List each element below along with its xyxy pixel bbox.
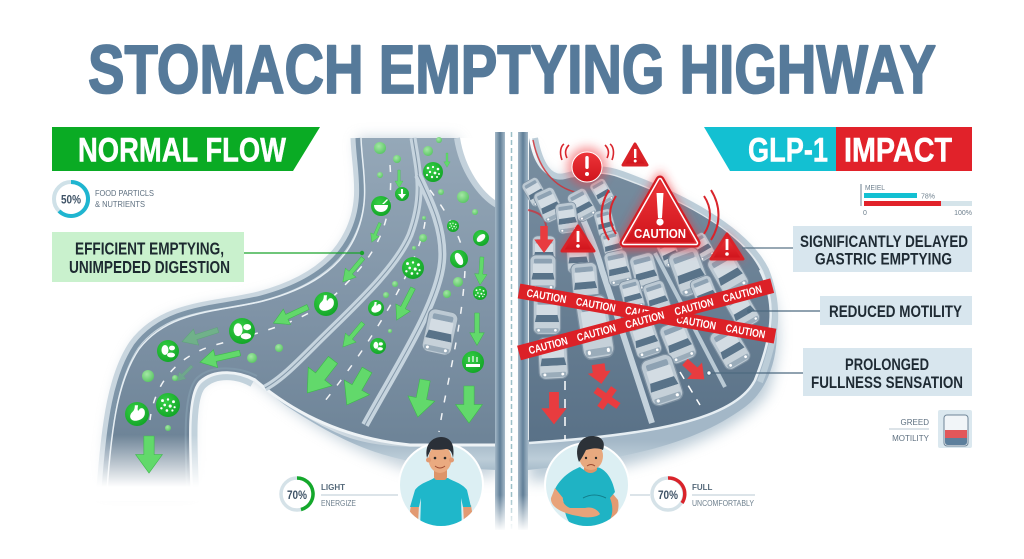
highway: GLP-1 congested road	[528, 138, 778, 482]
caution tapes: CAUTION	[722, 284, 763, 306]
callout: efficient emptying: EFFICIENT EMPTYING,	[75, 238, 224, 258]
header: normal flow: NORMAL FLOW	[78, 132, 287, 170]
callout: efficient emptying	[52, 232, 364, 282]
caution tapes: CAUTION	[725, 323, 766, 341]
stat ring: 70% light	[281, 478, 398, 510]
red blocked arrows	[534, 226, 712, 424]
person: light and energized	[399, 437, 483, 530]
caution tapes: CAUTION	[624, 310, 666, 331]
caution tapes: CAUTION	[527, 335, 569, 357]
mini bar chart: 100%	[954, 210, 972, 217]
highway: normal flow stomach road	[80, 138, 497, 501]
callout: delayed gastric emptying: SIGNIFICANTLY DELAYED	[800, 232, 968, 251]
mini bar chart: 78%	[921, 194, 935, 200]
warning siren circle	[561, 144, 613, 187]
lane divider 2	[365, 175, 442, 425]
callout: prolonged fullness: FULLNESS SENSATION	[811, 373, 963, 392]
stat ring: 70% light: ENERGIZE	[321, 499, 356, 508]
header: GLP-1 impact: IMPACT	[844, 132, 952, 170]
stat ring: 50% food particles: 50%	[61, 192, 81, 206]
stomach jar gauge: MOTILITY	[892, 434, 930, 443]
callout: prolonged fullness	[707, 348, 972, 396]
traffic jam cars	[520, 176, 762, 408]
callout: reduced motility	[747, 296, 972, 325]
mini bar chart: 0	[863, 210, 867, 217]
stat ring: 70% light: LIGHT	[321, 483, 345, 492]
caution tapes: CAUTION	[675, 314, 717, 333]
warning triangle left	[560, 223, 595, 253]
stat ring: 70% full	[630, 478, 755, 510]
food particle badges	[125, 162, 489, 426]
caution tapes: CAUTION	[673, 296, 715, 318]
caution tapes	[517, 278, 776, 360]
green particle dots	[142, 137, 478, 431]
mini bar chart: MEIEL	[865, 185, 885, 192]
lane divider 1	[265, 138, 419, 388]
center median	[488, 132, 536, 531]
big caution triangle	[602, 170, 718, 250]
caution tapes: CAUTION	[526, 287, 567, 306]
callout: delayed gastric emptying: GASTRIC EMPTYING	[815, 250, 952, 268]
stat ring: 70% light: 70%	[287, 488, 307, 502]
person: uncomfortably full	[545, 436, 629, 527]
stat ring: 50% food particles	[54, 182, 154, 216]
big caution triangle: CAUTION	[634, 227, 686, 241]
stat ring: 70% full: FULL	[692, 483, 713, 492]
callout: efficient emptying: UNIMPEDED DIGESTION	[69, 257, 230, 277]
stat ring: 50% food particles: FOOD PARTICLS	[95, 188, 154, 198]
caution tapes: CAUTION	[576, 322, 617, 344]
stat ring: 50% food particles: & NUTRIENTS	[95, 199, 145, 209]
header: GLP-1 impact	[704, 127, 972, 171]
small warning triangle top	[623, 144, 647, 165]
callout: delayed gastric emptying	[742, 226, 972, 272]
stat ring: 70% full: UNCOMFORTABLY	[692, 499, 755, 508]
car on normal flow highway	[421, 308, 459, 356]
green flow arrows	[136, 153, 488, 473]
caution tapes: CAUTION	[624, 305, 666, 324]
callout: reduced motility: REDUCED MOTILITY	[829, 302, 963, 321]
mini bar chart	[861, 184, 972, 217]
lower curb band	[250, 378, 497, 470]
callout: prolonged fullness: PROLONGED	[845, 355, 929, 374]
stomach jar gauge	[889, 410, 972, 448]
header: GLP-1 impact: GLP-1	[748, 132, 828, 170]
stomach jar gauge: GREED	[901, 418, 929, 427]
stat ring: 70% full: 70%	[658, 488, 678, 502]
caution tapes: CAUTION	[575, 296, 616, 315]
warning triangle right	[709, 231, 745, 260]
